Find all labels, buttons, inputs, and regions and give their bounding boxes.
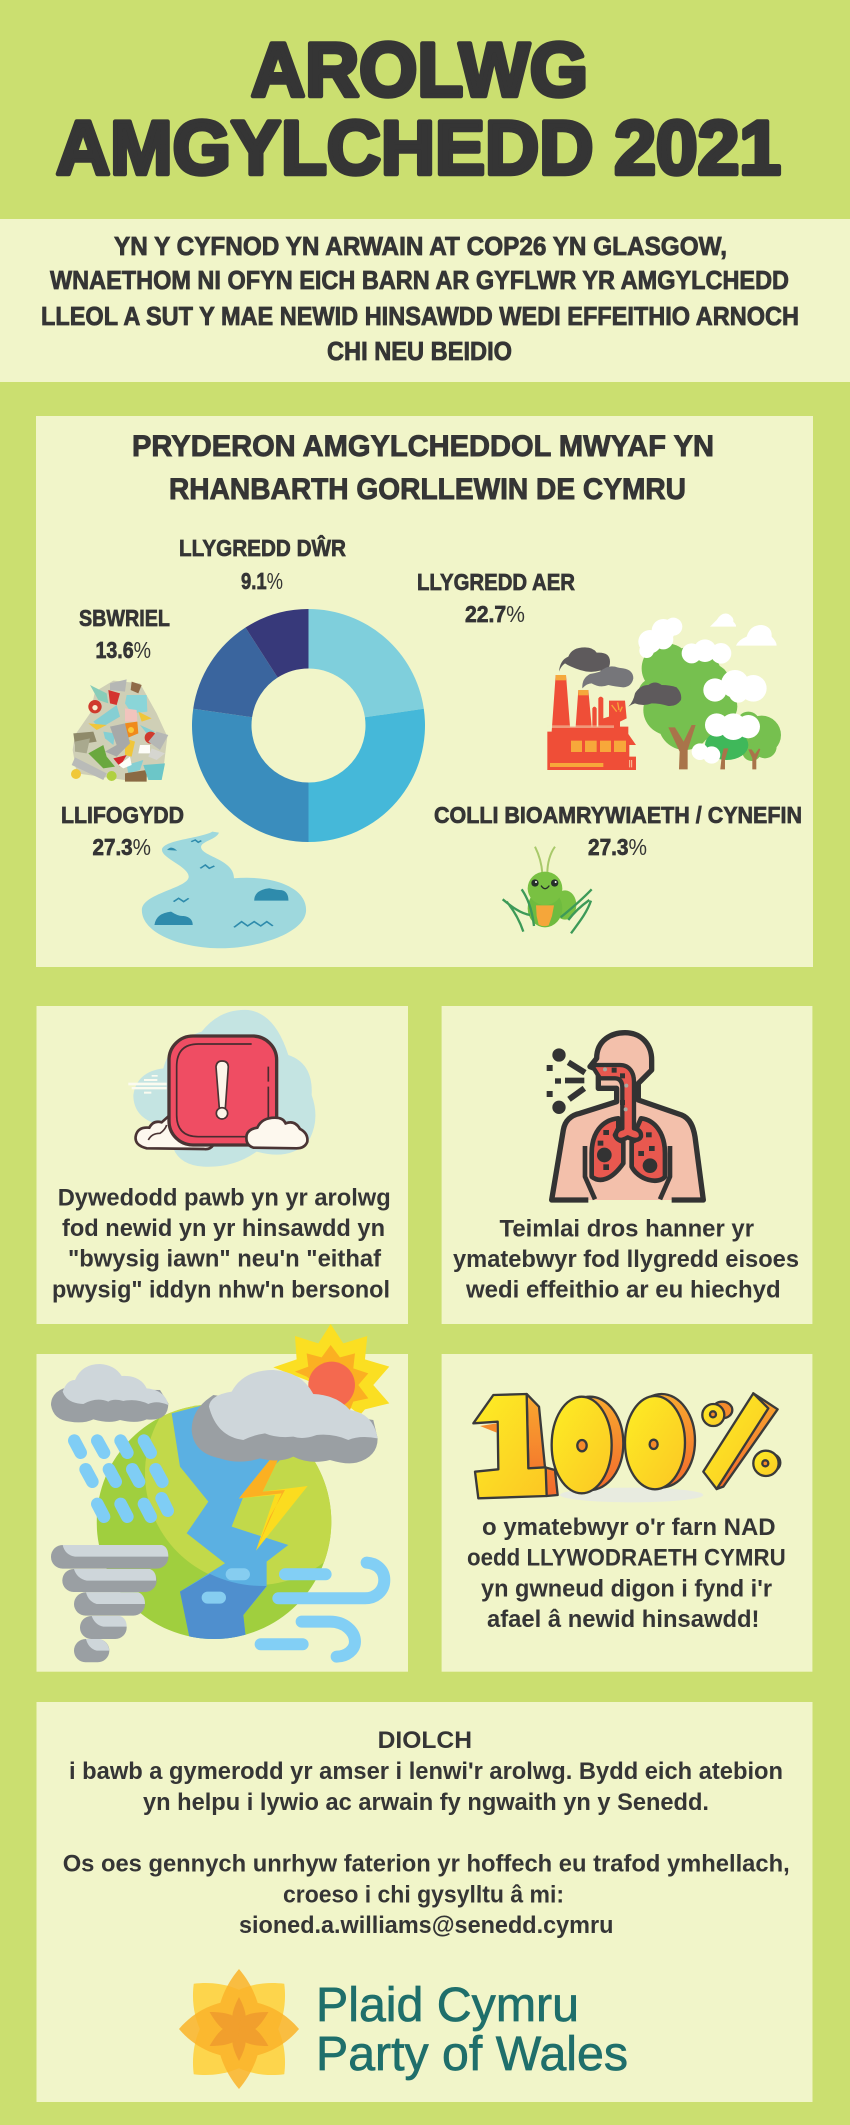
text: personal importance: pwysig" iddyn nhw'n bersonol	[52, 1277, 390, 1304]
title	[56, 28, 781, 191]
panel heading: RHANBARTH GORLLEWIN DE CYMRU	[169, 473, 686, 506]
icon: grasshopper	[503, 847, 592, 933]
intro band: CHI NEU BEIDIO	[327, 336, 512, 366]
text: health effects: wedi effeithio ar eu hiechyd	[465, 1277, 781, 1304]
label: water pollution: 9.1%	[241, 568, 283, 594]
heading: thanks: DIOLCH	[378, 1727, 472, 1754]
text: welsh government verdict: afael â newid hinsawdd!	[487, 1606, 760, 1633]
text: health effects: Teimlai dros hanner yr	[500, 1216, 754, 1243]
logo wordmark: Plaid Cymru	[316, 1979, 579, 2032]
logo: Plaid Cymru	[170, 1960, 628, 2098]
icon: factory and trees	[547, 613, 781, 770]
label: litter: SBWRIEL	[79, 605, 170, 631]
panel: personal importance	[36, 1006, 408, 1324]
label: water pollution	[179, 534, 346, 594]
lightning bolt	[239, 1435, 308, 1551]
label: flooding	[61, 802, 184, 860]
globe	[96, 1405, 332, 1639]
label: litter	[79, 605, 170, 663]
icon: flood water	[142, 832, 306, 948]
text: welsh government verdict	[467, 1514, 786, 1633]
text: health effects	[453, 1216, 799, 1304]
text: personal importance	[52, 1185, 391, 1304]
label: biodiversity loss	[434, 802, 802, 860]
title: AROLWG	[251, 28, 588, 113]
text: contact details: sioned.a.williams@senedd.cymru	[239, 1912, 613, 1939]
title: AMGYLCHEDD 2021	[56, 106, 781, 191]
text: thanks message	[69, 1758, 783, 1816]
icon: alert sign with clouds	[128, 1010, 315, 1167]
label: flooding: 27.3%	[92, 834, 151, 860]
label: air pollution: 22.7%	[465, 601, 525, 627]
text: personal importance: "bwysig iawn" neu'n "eithaf	[68, 1246, 382, 1273]
logo wordmark: Party of Wales	[316, 2028, 628, 2081]
panel: health effects	[442, 1006, 812, 1324]
panel: thanks	[36, 1702, 812, 2102]
icon: earth, storm, sun and tornado	[51, 1324, 389, 1662]
intro band: YN Y CYFNOD YN ARWAIN AT COP26 YN GLASGOW,	[114, 231, 727, 261]
text: health effects: ymatebwyr fod llygredd eisoes	[453, 1246, 799, 1273]
label: flooding: LLIFOGYDD	[61, 802, 184, 828]
text: thanks message: i bawb a gymerodd yr amser i lenwi'r arolwg. Bydd eich atebion	[69, 1758, 783, 1785]
panel heading	[132, 430, 714, 506]
wind	[208, 1563, 384, 1657]
small rain cloud	[51, 1364, 168, 1422]
rain drops	[74, 1441, 168, 1517]
label: water pollution: LLYGREDD DŴR	[179, 534, 346, 561]
text: personal importance: fod newid yn yr hinsawdd yn	[62, 1215, 385, 1242]
graphic: 100%	[473, 1393, 780, 1502]
donut chart	[192, 609, 425, 842]
panel: climate illustration	[36, 1324, 408, 1672]
text: welsh government verdict: oedd LLYWODRAETH CYMRU	[467, 1545, 786, 1572]
sun	[273, 1324, 389, 1415]
logo wordmark	[316, 1979, 628, 2081]
panel heading: PRYDERON AMGYLCHEDDOL MWYAF YN	[132, 430, 714, 463]
storm cloud	[192, 1370, 378, 1463]
label: litter: 13.6%	[96, 637, 151, 663]
tornado	[51, 1545, 168, 1662]
label: air pollution	[417, 569, 575, 627]
text: welsh government verdict: o ymatebwyr o'r farn NAD	[482, 1514, 776, 1541]
text: contact details: croeso i chi gysylltu â mi:	[283, 1882, 564, 1909]
icon: rubbish pile	[71, 679, 168, 782]
text: welsh government verdict: yn gwneud digon i fynd i'r	[481, 1576, 772, 1603]
label: biodiversity loss: 27.3%	[588, 834, 647, 860]
text: thanks message: yn helpu i lywio ac arwain fy ngwaith yn y Senedd.	[143, 1789, 709, 1816]
text: contact details	[63, 1851, 790, 1939]
label: air pollution: LLYGREDD AER	[417, 569, 575, 595]
label: biodiversity loss: COLLI BIOAMRYWIAETH / CYNEFIN	[434, 802, 802, 828]
intro band: WNAETHOM NI OFYN EICH BARN AR GYFLWR YR AMGYLCHEDD	[50, 265, 789, 295]
panel: environmental concerns	[36, 416, 813, 967]
icon: human lungs with pollution	[547, 1033, 703, 1200]
text: contact details: Os oes gennych unrhyw faterion yr hoffech eu trafod ymhellach,	[63, 1851, 790, 1878]
panel: 100 percent	[442, 1354, 812, 1672]
logo flower	[170, 1960, 308, 2098]
text: personal importance: Dywedodd pawb yn yr arolwg	[58, 1185, 391, 1212]
intro band	[0, 219, 850, 382]
